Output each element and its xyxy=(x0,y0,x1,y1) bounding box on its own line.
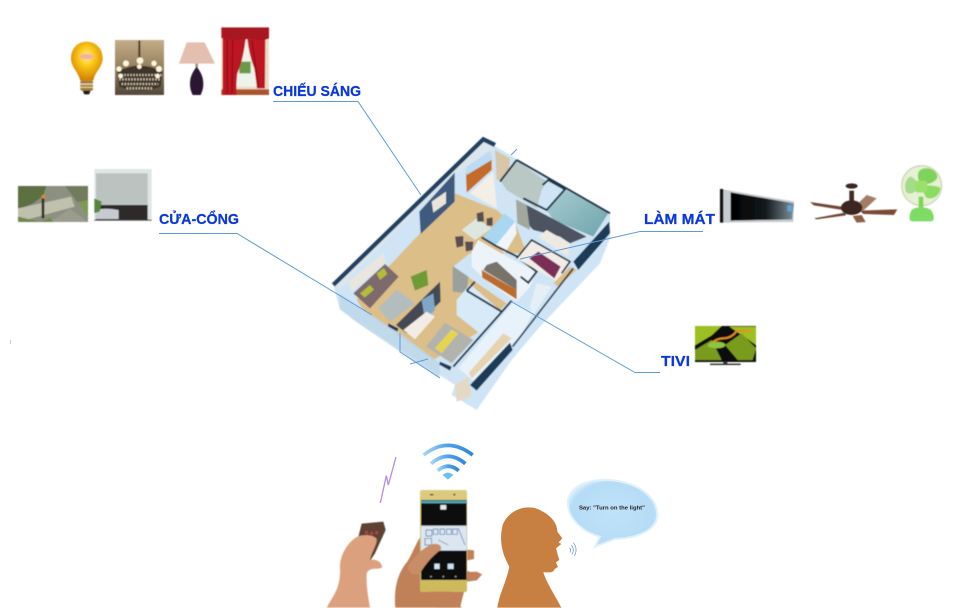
label: lighting: CHIẾU SÁNG xyxy=(273,83,361,100)
top utility room floor xyxy=(470,172,497,208)
hand behind xyxy=(395,537,482,608)
photo: chandelier xyxy=(115,40,164,95)
bed throw xyxy=(529,252,561,278)
wifi icon xyxy=(424,445,473,480)
sound waves xyxy=(569,543,576,556)
wood floor xyxy=(357,193,527,360)
armchair xyxy=(411,270,428,291)
wardrobe top xyxy=(483,213,515,245)
front columns xyxy=(388,323,452,371)
lower hand xyxy=(430,592,462,608)
wall outlines xyxy=(482,237,537,283)
phone speaker dots xyxy=(430,494,455,496)
dark bedroom wall xyxy=(517,200,587,243)
balcony box xyxy=(455,377,472,402)
app tiles xyxy=(425,528,465,545)
shelf alcove xyxy=(483,262,517,290)
app buttons xyxy=(434,564,440,569)
tv panel xyxy=(422,293,435,320)
wardrobe lower outline xyxy=(453,282,512,367)
label: tv: TIVI xyxy=(661,353,690,370)
label: doors and gates: CỬA-CỔNG xyxy=(159,210,239,228)
speech bubble xyxy=(568,480,657,547)
central wall xyxy=(472,240,537,302)
icon: desk fan xyxy=(902,166,942,221)
outer shell xyxy=(333,139,610,410)
gallery wall xyxy=(348,253,385,292)
second bed xyxy=(426,323,473,363)
wardrobe face xyxy=(496,222,517,253)
bathroom 1 xyxy=(500,161,547,208)
small wood corner xyxy=(553,267,577,287)
phone screen xyxy=(421,500,467,580)
phone body xyxy=(420,490,467,592)
key remote xyxy=(356,522,386,561)
remote in hand xyxy=(327,522,386,608)
kitchen upper xyxy=(466,151,493,175)
sofa cushions xyxy=(360,268,387,298)
bed throw yellow xyxy=(435,329,458,353)
bathroom 2 glass xyxy=(547,189,608,237)
headboard and tv xyxy=(538,230,570,257)
second bedroom divider xyxy=(396,282,441,333)
bubble text: Say: "Turn on the light" xyxy=(579,506,645,512)
dining table xyxy=(462,218,492,240)
thumb xyxy=(407,544,441,575)
label: cooling: LÀM MÁT xyxy=(644,211,715,228)
bed frame xyxy=(517,240,570,273)
grey door xyxy=(516,199,530,230)
lower dark panel xyxy=(470,343,513,391)
icon: air conditioner xyxy=(720,189,794,223)
photo: sliding gate xyxy=(18,186,88,222)
corridor floor xyxy=(469,333,512,378)
dining chairs xyxy=(455,212,493,252)
control methods xyxy=(327,445,657,608)
hand with remote xyxy=(327,535,382,608)
fingers front xyxy=(467,550,482,580)
dresser xyxy=(403,312,435,339)
stray mark xyxy=(10,340,11,344)
coffee table xyxy=(378,289,415,322)
back wall xyxy=(335,142,495,290)
icon: ceiling fan xyxy=(810,183,897,223)
back wall lines xyxy=(500,160,610,213)
blue accent wall xyxy=(419,173,455,234)
beige corridor top xyxy=(495,150,510,180)
icon: light bulb xyxy=(71,42,103,94)
right bath xyxy=(530,283,552,315)
corridor wall xyxy=(458,303,533,383)
sofa xyxy=(353,264,399,308)
app grid xyxy=(421,526,467,551)
icon: television xyxy=(695,326,756,365)
right dark panel xyxy=(573,222,610,270)
photo: roller shutter xyxy=(94,169,152,221)
front glass xyxy=(339,293,440,378)
kitchen cabinet xyxy=(466,158,492,193)
icon: table lamp xyxy=(179,42,215,95)
smartphone in hand xyxy=(395,490,482,608)
lighting icons xyxy=(71,27,269,95)
signal bolt xyxy=(380,457,396,503)
app button 2 xyxy=(448,564,454,569)
connector lines xyxy=(159,102,703,378)
outer right wall edge xyxy=(513,268,573,347)
door and gate photos xyxy=(18,169,152,222)
speaking head silhouette xyxy=(497,507,562,608)
tv shelf xyxy=(482,270,517,299)
cooling icons xyxy=(720,166,942,223)
thick roof edge xyxy=(333,139,495,285)
wall art xyxy=(432,192,446,213)
remote buttons xyxy=(365,531,378,535)
grey door lower xyxy=(453,266,468,293)
master bed xyxy=(517,240,570,282)
apartment floor plan xyxy=(333,139,610,410)
wardrobe lower xyxy=(457,284,502,333)
nav keys xyxy=(430,576,457,578)
status bar xyxy=(421,501,467,503)
photo: red curtains xyxy=(221,27,269,95)
camera icon xyxy=(440,505,446,510)
